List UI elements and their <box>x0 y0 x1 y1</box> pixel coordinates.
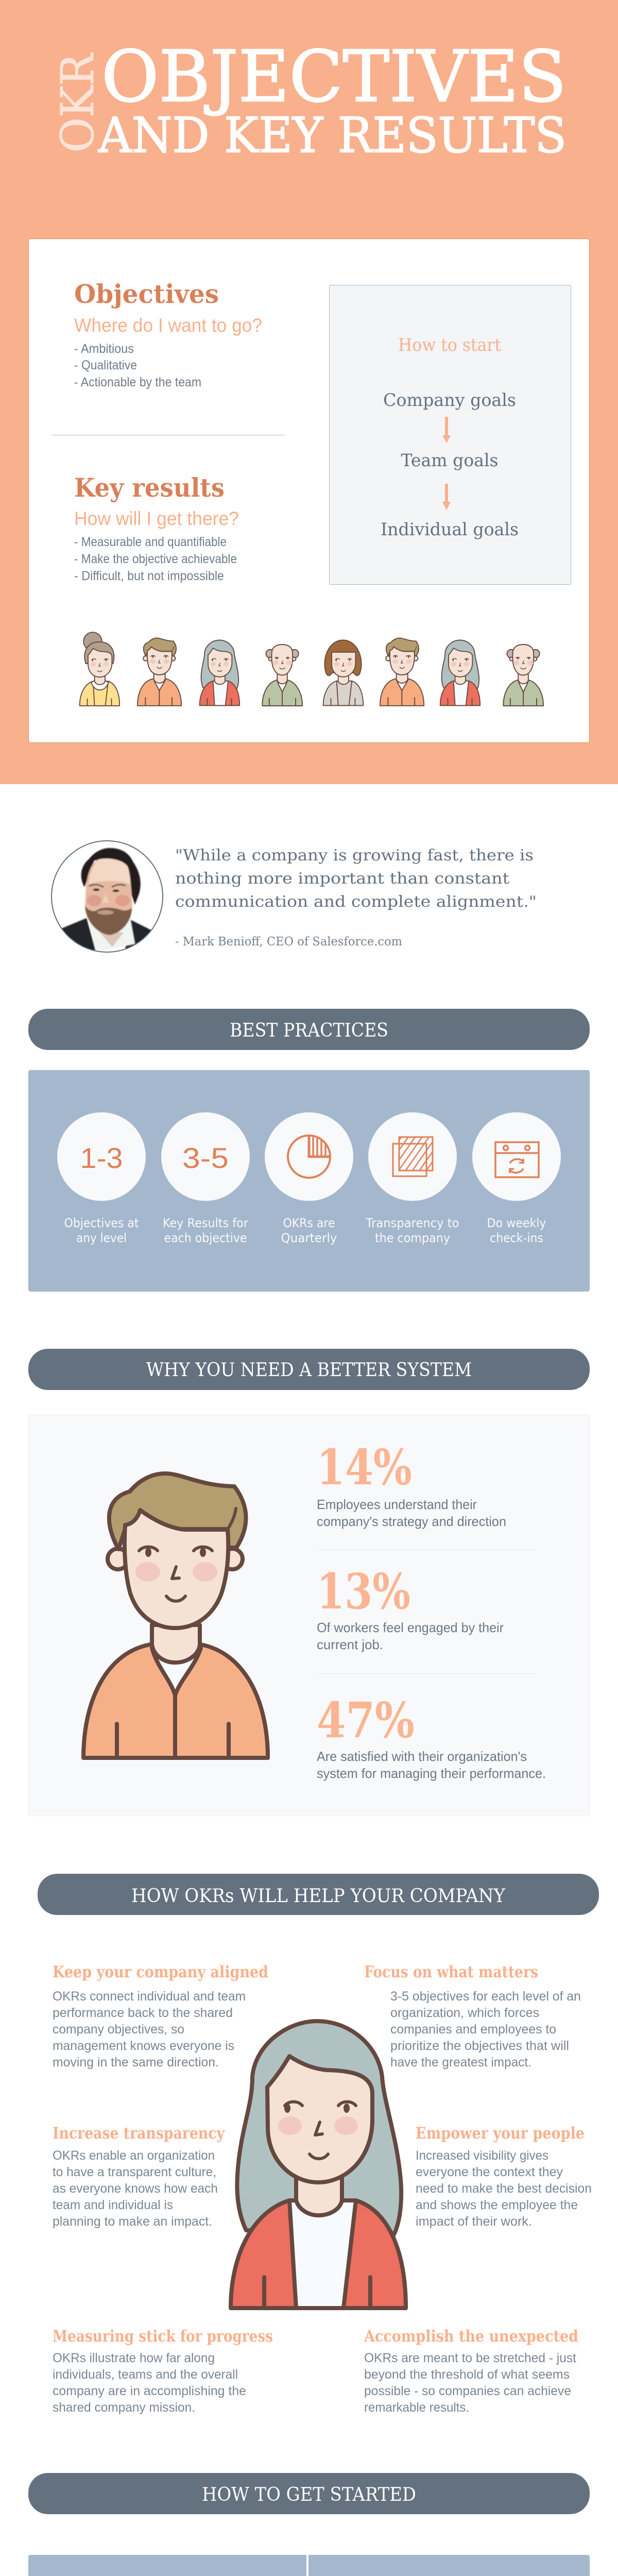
benefit: keep aligned: management knows everyone is <box>53 2039 234 2053</box>
benefit: focus: have the greatest impact. <box>390 2055 531 2070</box>
benefit: focus: 3-5 objectives for each level of an <box>390 1989 581 2004</box>
people row <box>80 632 543 706</box>
benefit: transparency: as everyone knows how each <box>53 2181 218 2196</box>
section heading: how to get started: HOW TO GET STARTED <box>202 2484 416 2505</box>
benefit: transparency: team and individual is <box>53 2198 173 2212</box>
benefit: transparency <box>53 2124 225 2229</box>
practice: key results for each objective: each objective <box>164 1231 247 1245</box>
icon: pie chart <box>288 1136 330 1178</box>
text block: objectives <box>74 279 262 389</box>
benefit: measuring stick: OKRs illustrate how far along <box>53 2351 215 2365</box>
stat: 13 percent <box>317 1563 504 1652</box>
benefit: measuring stick: individuals, teams and the overall <box>53 2367 238 2382</box>
benefit: empower: impact of their work. <box>416 2214 532 2229</box>
panel: intro <box>29 239 589 743</box>
title <box>51 36 566 164</box>
list: key result traits: - Make the objective achievable <box>74 552 237 566</box>
person: man orange <box>138 638 181 706</box>
list: objective traits: - Qualitative <box>74 358 137 372</box>
header background <box>0 0 618 784</box>
panel: how to start <box>330 285 571 584</box>
section heading: how to get started <box>28 2473 590 2514</box>
arrow: company to team <box>442 417 451 443</box>
practice: key results for each objective: 3-5 <box>182 1142 229 1174</box>
quote: "While a company is growing fast, there is <box>175 846 534 865</box>
title: OKR rotated: OKR <box>51 52 104 152</box>
practice: key results for each objective <box>161 1112 250 1245</box>
portrait photo <box>52 841 163 958</box>
stat: 14 percent: Employees understand their <box>317 1497 477 1512</box>
benefit: transparency: planning to make an impact. <box>53 2214 212 2229</box>
practice: transparency: Transparency to <box>366 1216 459 1230</box>
stat: 13 percent: 13% <box>317 1563 410 1620</box>
person: older man 2 <box>503 645 543 706</box>
benefit: keep aligned: Keep your company aligned <box>53 1963 268 1981</box>
practice: weekly check-ins: Do weekly <box>487 1216 546 1230</box>
benefit: keep aligned: moving in the same direction. <box>53 2055 219 2070</box>
practice: key results for each objective: Key Results for <box>163 1216 248 1230</box>
section heading: why you need a better system: WHY YOU NEED A BETTER SYSTEM <box>146 1360 472 1381</box>
benefit: keep aligned: company objectives, so <box>53 2022 184 2037</box>
stat: 14 percent: 14% <box>317 1439 412 1496</box>
panel: why better system <box>29 1415 589 1816</box>
benefit: focus: prioritize the objectives that will <box>390 2039 569 2053</box>
subheading: where do I want to go: Where do I want to go? <box>74 315 262 336</box>
text block: key results <box>74 472 239 583</box>
heading: how to start: How to start <box>398 335 501 355</box>
practice: weekly check-ins: check-ins <box>490 1231 543 1245</box>
benefit: measuring stick: Measuring stick for progress <box>53 2327 273 2346</box>
person: bun hair <box>80 632 119 706</box>
panel: best practices <box>28 1070 590 1292</box>
list: objective traits <box>74 342 201 389</box>
stat: 13 percent: current job. <box>317 1637 383 1652</box>
benefit: measuring stick: company are in accomplishing the <box>53 2384 246 2398</box>
stat: 47 percent: Are satisfied with their organization's <box>317 1749 527 1764</box>
practice: OKRs are quarterly <box>265 1112 353 1245</box>
quote <box>175 846 537 948</box>
benefit: keep aligned <box>53 1963 268 2070</box>
person: older man <box>262 645 302 706</box>
practice: transparency <box>366 1112 459 1245</box>
benefit: accomplish: possible - so companies can achieve <box>364 2384 571 2398</box>
goal: company: Company goals <box>383 390 516 411</box>
title: objectives: OBJECTIVES <box>101 36 566 118</box>
illustration: man <box>83 1473 268 1758</box>
benefit: focus <box>364 1963 581 2070</box>
practice: objectives at any level: 1-3 <box>80 1142 123 1174</box>
benefit: transparency: Increase transparency <box>53 2124 225 2143</box>
person: man orange 2 <box>380 638 424 706</box>
icon: calendar with sync arrows <box>495 1142 539 1177</box>
person: brown bob <box>323 640 363 705</box>
benefit: accomplish: beyond the threshold of what seems <box>364 2367 570 2382</box>
section heading: best practices: BEST PRACTICES <box>230 1020 388 1041</box>
heading: key results: Key results <box>74 472 225 503</box>
practice: weekly check-ins <box>472 1112 561 1245</box>
person: long hair <box>200 640 239 705</box>
person: long hair 2 <box>440 640 480 705</box>
stat: 14 percent: company's strategy and direction <box>317 1514 506 1529</box>
benefit: keep aligned: OKRs connect individual and team <box>53 1989 246 2004</box>
goal: team: Team goals <box>401 450 499 471</box>
benefit: accomplish: remarkable results. <box>364 2400 469 2415</box>
benefit: accomplish: Accomplish the unexpected <box>364 2327 578 2346</box>
practice: objectives at any level: any level <box>76 1231 127 1245</box>
practice: OKRs are quarterly: Quarterly <box>281 1231 337 1245</box>
section heading: how OKRs will help <box>38 1874 599 1915</box>
section heading: how OKRs will help: HOW OKRs WILL HELP YOUR COMPANY <box>131 1886 506 1907</box>
stat: 13 percent: Of workers feel engaged by their <box>317 1620 504 1635</box>
section heading: why you need a better system <box>28 1349 590 1390</box>
section heading: best practices <box>28 1009 590 1050</box>
stat: 47 percent: system for managing their performance. <box>317 1766 546 1781</box>
illustration: woman <box>231 2021 406 2308</box>
benefit: empower: and shows the employee the <box>416 2198 578 2212</box>
quote: nothing more important than constant <box>175 870 509 888</box>
list: objective traits: - Actionable by the team <box>74 375 201 389</box>
benefit: measuring stick: shared company mission. <box>53 2400 195 2415</box>
benefit: focus: companies and employees to <box>390 2022 556 2037</box>
benefit: accomplish <box>364 2327 578 2415</box>
benefit: empower <box>416 2124 592 2229</box>
benefit: accomplish: OKRs are meant to be stretched - just <box>364 2351 576 2365</box>
practice: objectives at any level: Objectives at <box>64 1216 139 1230</box>
benefit: keep aligned: performance back to the shared <box>53 2006 233 2020</box>
list: key result traits: - Difficult, but not impossible <box>74 569 224 583</box>
benefit: transparency: to have a transparent culture, <box>53 2165 216 2179</box>
list: key result traits <box>74 535 237 583</box>
heading: objectives: Objectives <box>74 279 219 309</box>
stat: 14 percent <box>317 1439 506 1529</box>
benefit: empower: everyone the context they <box>416 2165 563 2179</box>
subheading: how will I get there: How will I get there? <box>74 508 239 529</box>
benefit: empower: Increased visibility gives <box>416 2148 548 2163</box>
title: and key results: AND KEY RESULTS <box>98 108 566 164</box>
list: key result traits: - Measurable and quantifiable <box>74 535 227 549</box>
practice: objectives at any level <box>57 1112 146 1245</box>
benefit: focus: Focus on what matters <box>364 1963 538 1981</box>
quote: communication and complete alignment." <box>175 893 537 911</box>
benefit: measuring stick <box>53 2327 273 2415</box>
panel: timeline <box>28 2555 590 2576</box>
benefit: empower: need to make the best decision <box>416 2181 592 2196</box>
goal: individual: Individual goals <box>381 519 519 540</box>
benefit: transparency: OKRs enable an organization <box>53 2148 215 2163</box>
quote attribution: - Mark Benioff, CEO of Salesforce.com <box>175 935 402 948</box>
stat: 47 percent: 47% <box>317 1692 415 1749</box>
benefit: focus: organization, which forces <box>390 2006 539 2020</box>
practice: OKRs are quarterly: OKRs are <box>283 1216 335 1230</box>
list: objective traits: - Ambitious <box>74 342 134 356</box>
stat: 47 percent <box>317 1692 546 1781</box>
benefit: empower: Empower your people <box>416 2124 585 2143</box>
practice: transparency: the company <box>375 1231 450 1245</box>
icon: overlapping sheets <box>393 1137 433 1176</box>
arrow: team to individual <box>442 484 451 510</box>
